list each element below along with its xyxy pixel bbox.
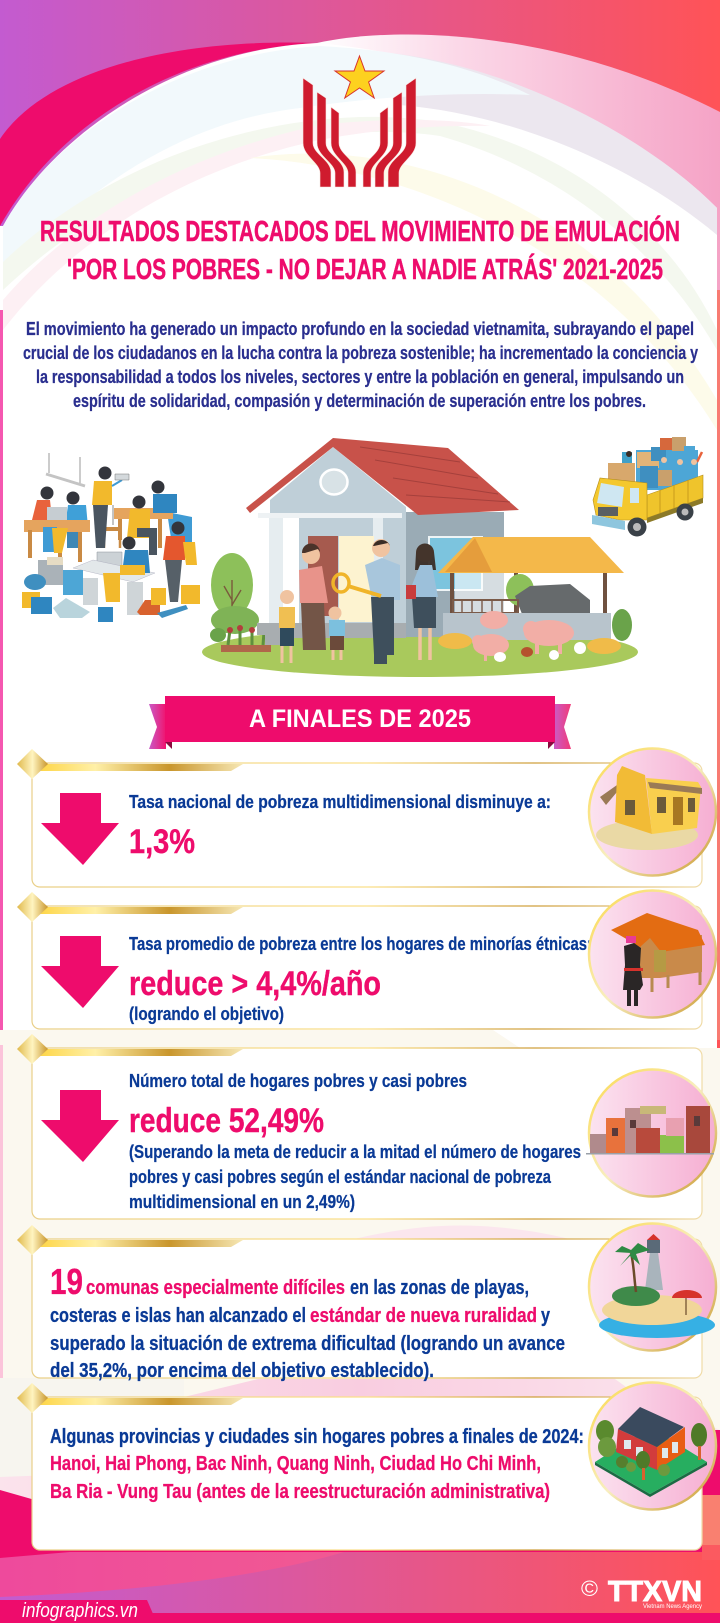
label: Tasa nacional de pobreza multidimensional disminuye a: [129,792,551,812]
panel: hogares pobres y casi pobres [17,1034,716,1219]
ribbon [17,749,243,779]
note [129,1142,581,1212]
logo: star and hands emblem [303,56,416,187]
note: (logrando el objetivo) [129,1004,284,1024]
roof [246,438,519,515]
card frame [32,763,702,887]
card frame [32,1048,702,1219]
label: Número total de hogares pobres y casi pobres [129,1071,467,1091]
window [429,537,482,590]
text block: en las zonas de playas, [350,1277,529,1299]
value: reduce > 4,4%/año [129,965,381,1003]
left workers [40,486,54,500]
value: 1,3% [129,823,195,861]
footer TTXVN logo: © [581,1576,598,1601]
icon: golden key [333,574,381,596]
text block: Algunas provincias y ciudades sin hogares pobres a finales de 2024: [50,1426,584,1448]
round vent [320,470,348,494]
steps [257,623,406,645]
text block: superado la situación de extrema dificultad (logrando un avance [50,1333,565,1355]
cream lower background [0,1030,720,1500]
intro paragraph [23,319,698,411]
buffalo [515,584,590,614]
icon: yellow star [335,56,384,98]
icon: favela buildings in circle [586,1070,716,1196]
text block: comunas especialmente difíciles [86,1277,345,1299]
ground [202,627,638,677]
stool [102,527,122,531]
right table [114,508,173,519]
icon: adobe house in circle [589,748,716,876]
icon: down arrow [41,793,119,865]
section banner: A FINALES DE 2025: A FINALES DE 2025 [249,705,471,733]
wheels [628,518,646,536]
label: Tasa promedio de pobreza entre los hogares de minorías étnicas: [129,934,592,954]
left table [47,507,67,525]
lower gradient [0,1552,720,1623]
note: (Superando la meta de reducir a la mitad el número de hogares [129,1142,581,1162]
text block: y [541,1305,551,1327]
hut [438,537,624,640]
icon: red strands [303,78,416,187]
illustration: garment workshop [22,453,200,622]
text block: costeras e islas han alcanzado el [50,1305,306,1327]
icon: down arrow [41,1090,119,1162]
panel: 19 comunas [17,1224,716,1382]
cargo [608,437,702,490]
icon: stilt house in circle [589,890,716,1018]
door [308,536,338,616]
footer TTXVN logo: Vietnam News Agency [643,1604,702,1610]
value: reduce 52,49% [129,1102,324,1140]
standing man [98,466,112,480]
footer TTXVN logo: TTXVN [608,1576,702,1608]
ribbon [17,1225,243,1255]
pigs and chickens [472,620,574,661]
icon: down arrow [41,936,119,1008]
tree [210,553,271,652]
card frame [32,1239,702,1378]
yellow worker [132,496,146,508]
ribbon [17,1383,243,1413]
people [279,539,438,664]
icon: island in circle [589,1224,716,1350]
card frame [32,906,702,1029]
panel: provincias sin hogares pobres [17,1382,716,1550]
machines and bags [38,560,63,585]
house front wall [270,447,406,632]
note: pobres y casi pobres según el estándar nacional de pobreza [129,1167,552,1187]
text block: del 35,2%, por encima del objetivo establecido). [50,1360,434,1382]
text block: estándar de nueva ruralidad [310,1305,537,1327]
truck bed [647,475,703,518]
ribbon [17,892,243,922]
front workbench [83,578,143,615]
back fabric [167,512,192,545]
illustration: loaded truck [592,437,703,536]
text block [50,1426,584,1503]
panel: tasa nacional de pobreza [17,748,716,887]
ribbon [17,1034,243,1064]
title [40,214,680,286]
magenta lower band [0,1430,720,1623]
text block: Hanoi, Hai Phong, Bac Ninh, Quang Ninh, Ciudad Ho Chi Minh, [50,1453,541,1475]
icon: isometric house in circle [589,1382,716,1510]
cab [593,478,647,520]
card frame [32,1397,702,1550]
section banner: A FINALES DE 2025 [149,696,571,749]
porch [258,513,402,518]
right woman [172,522,184,534]
footer site label: infographics.vn [22,1600,138,1622]
panel: minorias etnicas [17,890,716,1029]
text block: 19 [50,1261,83,1302]
ceiling lamp [49,453,80,484]
text block: Ba Ria - Vung Tau (antes de la reestructuración administrativa) [50,1481,550,1503]
blue man [152,480,164,494]
house side wall [404,512,504,637]
illustration: house key handover [202,438,638,677]
text block [50,1261,565,1382]
note: multidimensional en un 2,49%) [129,1192,355,1212]
